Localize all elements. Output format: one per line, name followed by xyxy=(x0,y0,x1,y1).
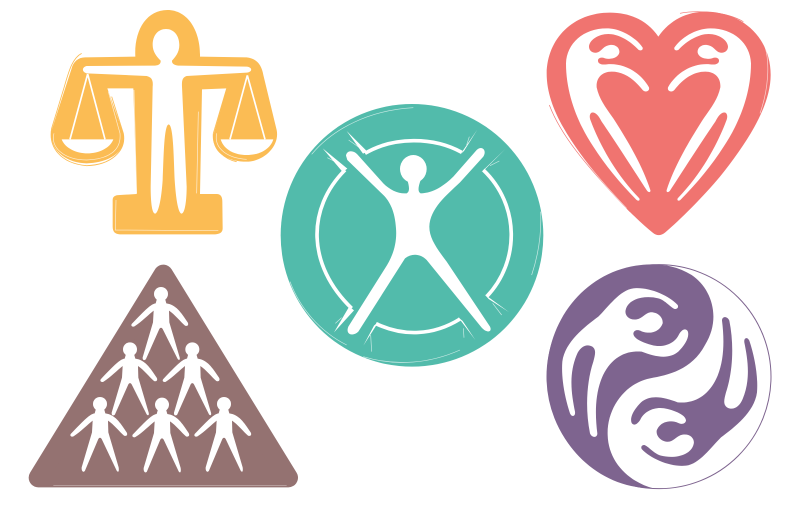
brush edge strokes xyxy=(549,12,743,212)
star figure xyxy=(346,148,491,334)
spike strokes xyxy=(323,130,509,346)
top person xyxy=(131,287,188,360)
figure cut-out xyxy=(83,29,251,214)
bottom left person xyxy=(70,397,127,472)
left pan xyxy=(62,139,113,153)
right figure cut-out xyxy=(667,28,751,201)
icon: human pyramid in triangle xyxy=(38,274,288,485)
bottom right person xyxy=(194,397,251,472)
icon: person as balance scales xyxy=(51,10,277,234)
middle right person xyxy=(163,342,220,415)
bottom centre person xyxy=(132,398,189,472)
lower purple figure xyxy=(631,317,757,466)
upper white figure xyxy=(562,288,688,437)
right pan xyxy=(221,139,273,155)
brush edge strokes xyxy=(53,484,287,486)
left figure cut-out xyxy=(566,28,650,201)
scale strings xyxy=(70,74,265,139)
purple half xyxy=(547,264,713,488)
middle left person xyxy=(100,342,157,415)
ring arc segments xyxy=(317,141,511,333)
icon: star-shaped figure in circle xyxy=(281,104,543,367)
icon: heart with two mirrored figures xyxy=(547,12,771,235)
icon: yin-yang of two figures xyxy=(547,264,771,489)
brush edge strokes xyxy=(290,108,541,362)
brush edge strokes xyxy=(53,90,247,231)
